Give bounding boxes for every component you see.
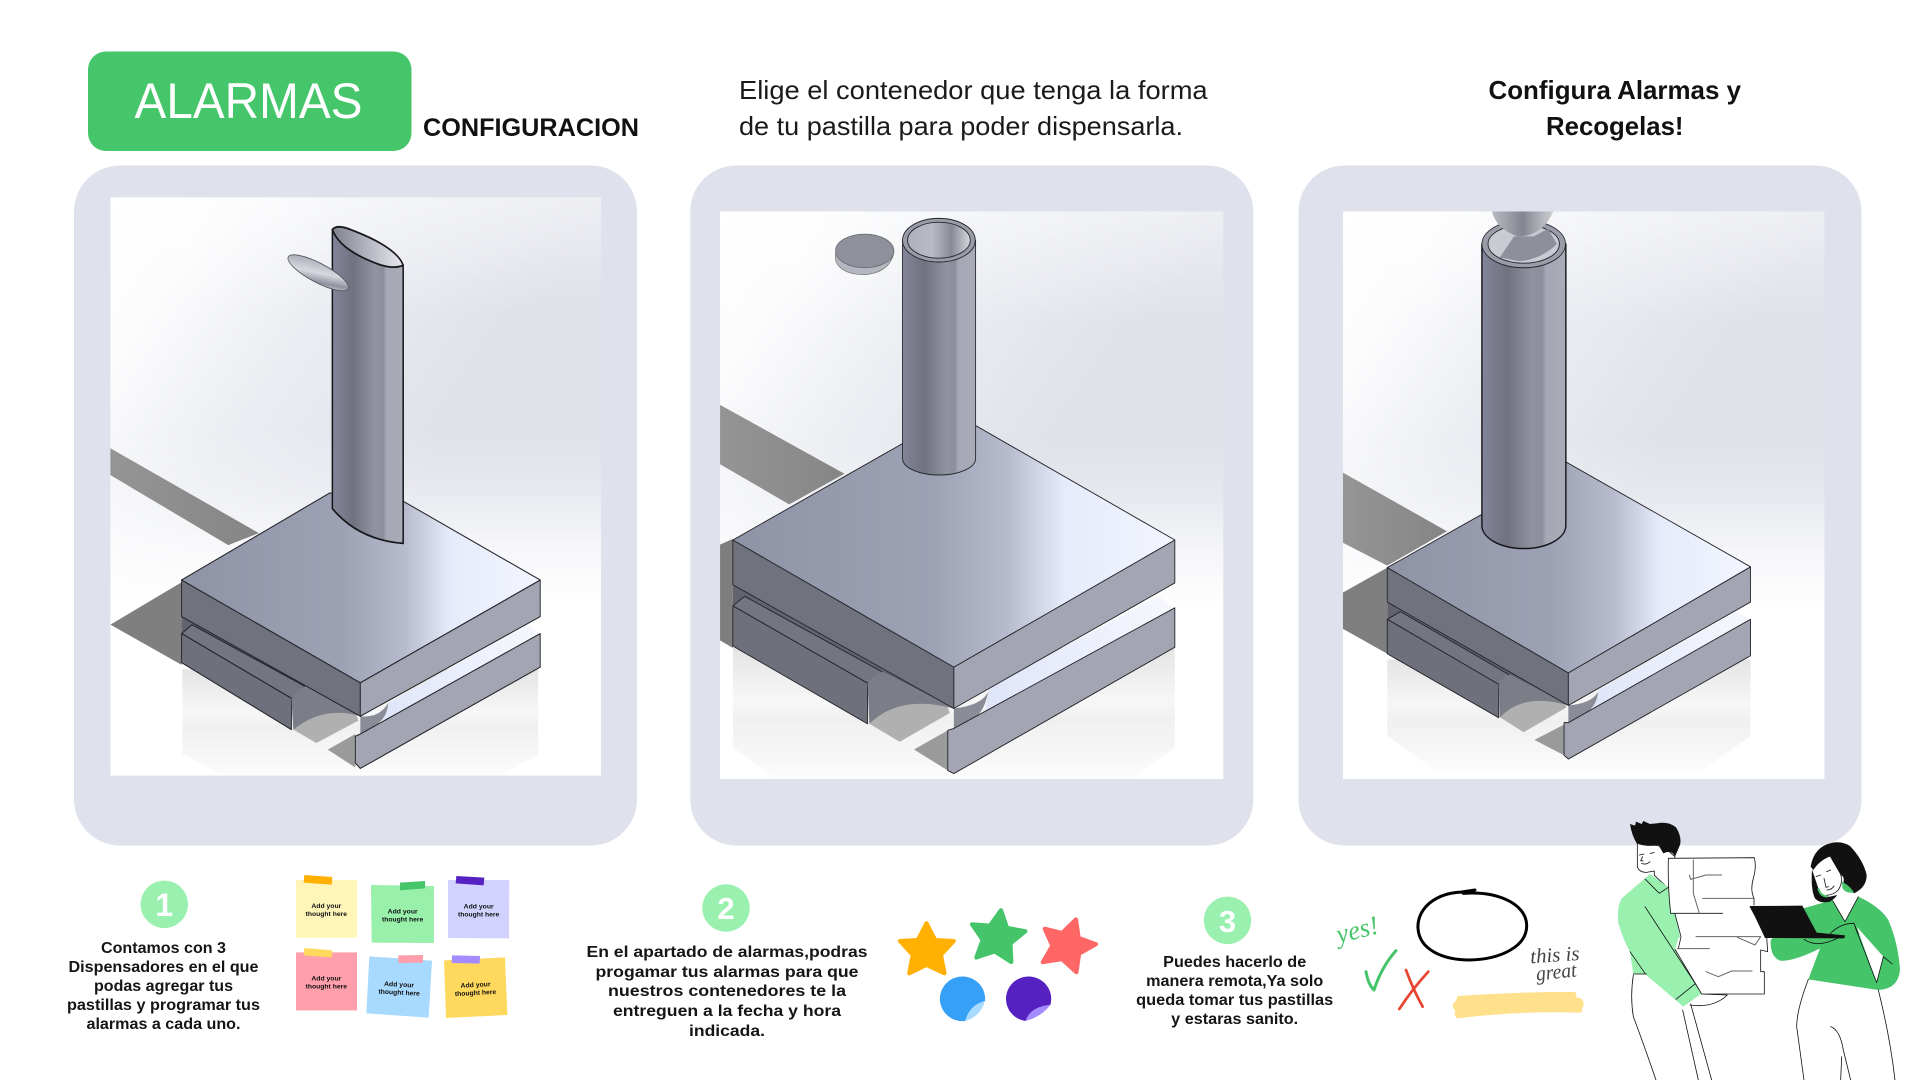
sticky notes: Add your bbox=[311, 903, 342, 910]
text: step 1 description: alarmas a cada uno. bbox=[86, 1016, 240, 1033]
text: step 2 description: nuestros contenedores te la bbox=[608, 983, 846, 1000]
woman bbox=[1750, 842, 1900, 1080]
step 1 bbox=[67, 875, 509, 1033]
step 2 bbox=[586, 884, 1102, 1040]
sticky notes bbox=[296, 875, 509, 1018]
number badge 1 bbox=[141, 881, 188, 928]
number badge 1: 1 bbox=[155, 887, 173, 923]
sticky notes: thought here bbox=[458, 912, 500, 919]
doodles: yes, check, cross, circle, highlight: yes! bbox=[1330, 910, 1382, 950]
text: step 2 description: En el apartado de alarmas,podras bbox=[586, 944, 868, 961]
text: step 3 description: Puedes hacerlo de bbox=[1163, 954, 1306, 971]
number badge 3 bbox=[1204, 897, 1251, 944]
text: step 3 description: manera remota,Ya solo bbox=[1146, 973, 1323, 990]
sticky notes: thought here bbox=[378, 989, 420, 998]
heading: elige el contenedor: Elige el contenedor que tenga la forma bbox=[739, 75, 1208, 105]
render: dispensador con tubo redondo bbox=[720, 211, 1223, 779]
sticky notes: thought here bbox=[306, 911, 347, 918]
text: step 3 description: y estaras sanito. bbox=[1171, 1011, 1298, 1028]
sticky notes: thought here bbox=[455, 989, 497, 998]
step 3 bbox=[1136, 890, 1583, 1028]
sticky notes: Add your bbox=[464, 904, 494, 911]
sticky notes: thought here bbox=[382, 917, 424, 924]
text: step 2 description bbox=[586, 944, 868, 1040]
panel: dispensador 1 bbox=[74, 166, 637, 846]
stickers: stars and circles bbox=[900, 907, 1102, 1021]
panel: dispensador 2 bbox=[690, 166, 1253, 846]
render: dispensador con ranura oblicua bbox=[110, 197, 601, 776]
text: step 1 description bbox=[67, 940, 260, 1033]
heading: configura alarmas y recogelas: Recogelas! bbox=[1546, 111, 1684, 141]
text: step 1 description: podas agregar tus bbox=[94, 978, 233, 995]
panel: dispensador 3 bbox=[1298, 166, 1862, 846]
doodles: yes, check, cross, circle, highlight bbox=[1330, 890, 1583, 1018]
heading: configura alarmas y recogelas: Configura Alarmas y bbox=[1488, 75, 1742, 105]
sticky notes: thought here bbox=[306, 984, 347, 991]
title badge: ALARMAS: ALARMAS bbox=[134, 73, 362, 129]
text: step 1 description: Contamos con 3 bbox=[101, 940, 226, 957]
sticky notes: Add your bbox=[384, 981, 415, 989]
title badge: ALARMAS bbox=[88, 52, 412, 151]
text: step 2 description: indicada. bbox=[689, 1023, 765, 1040]
doodles: yes, check, cross, circle, highlight: this is bbox=[1529, 943, 1580, 968]
stack of boxes bbox=[1668, 858, 1768, 994]
text: step 2 description: progamar tus alarmas para que bbox=[596, 964, 859, 981]
text: step 1 description: pastillas y programar tus bbox=[67, 997, 260, 1014]
sticky notes: Add your bbox=[460, 981, 491, 990]
text: step 3 description bbox=[1136, 954, 1333, 1028]
illustration: two people with boxes and laptop bbox=[1618, 821, 1900, 1080]
render: dispensador con esfera bbox=[1343, 211, 1824, 779]
text: step 3 description: queda tomar tus pastillas bbox=[1136, 992, 1333, 1009]
number badge 3: 3 bbox=[1219, 904, 1236, 939]
number badge 2: 2 bbox=[717, 891, 735, 926]
sticky notes: Add your bbox=[388, 909, 418, 916]
heading: configuracion: CONFIGURACION bbox=[423, 114, 639, 142]
text: step 2 description: entreguen a la fecha y hora bbox=[613, 1003, 841, 1020]
sticky notes: Add your bbox=[311, 976, 342, 983]
man bbox=[1618, 821, 1727, 1080]
text: step 1 description: Dispensadores en el que bbox=[68, 959, 259, 976]
number badge 2 bbox=[702, 884, 750, 932]
doodles: yes, check, cross, circle, highlight: great bbox=[1535, 959, 1579, 986]
heading: elige el contenedor: de tu pastilla para poder dispensarla. bbox=[739, 111, 1183, 141]
heading: configura alarmas y recogelas bbox=[1488, 75, 1742, 141]
heading: elige el contenedor bbox=[739, 75, 1208, 141]
